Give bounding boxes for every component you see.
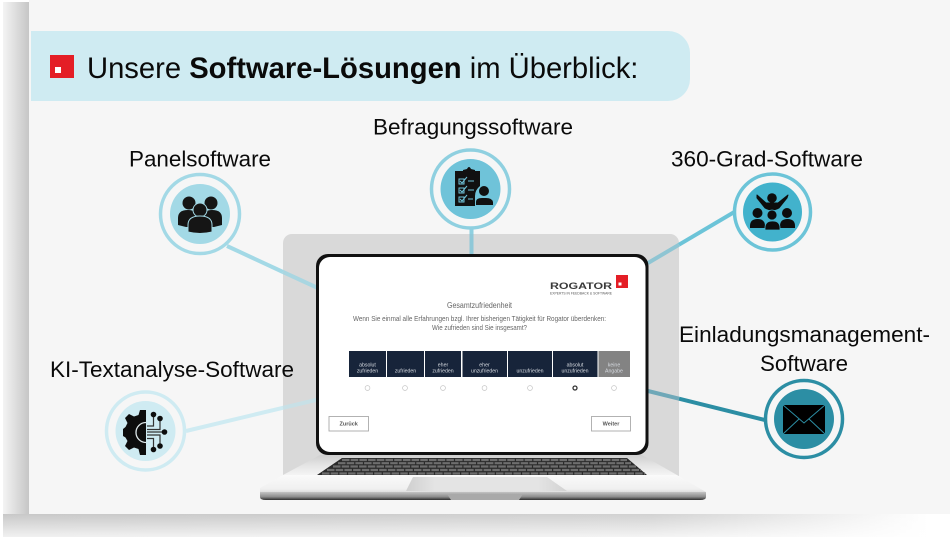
screen xyxy=(319,257,646,452)
label: Einladungsmanagement-Software xyxy=(679,322,930,376)
icon: gear with circuit xyxy=(123,410,167,455)
button: Zurück xyxy=(329,416,368,431)
screen bezel xyxy=(316,254,648,455)
answer scale: eher xyxy=(479,362,490,368)
node: Panelsoftware xyxy=(160,174,240,254)
button: Zurück: Zurück xyxy=(340,422,359,428)
answer scale: zufrieden xyxy=(432,368,454,374)
title: Unsere Software-Lösungen im Überblick: xyxy=(87,53,638,85)
icon: group of people xyxy=(178,196,222,234)
header banner xyxy=(31,31,690,101)
survey question: Gesamtzufriedenheit xyxy=(447,301,513,310)
answer scale: zufrieden xyxy=(395,368,416,374)
answer scale: absolut xyxy=(359,362,376,368)
laptop xyxy=(260,254,706,500)
icon: red square xyxy=(50,55,74,78)
trackpad xyxy=(406,477,567,491)
answer scale: zufrieden xyxy=(357,368,378,374)
survey question: Wie zufrieden sind Sie insgesamt? xyxy=(432,323,527,332)
label: Einladungsmanagement-Software: Software xyxy=(760,351,848,376)
survey question xyxy=(353,301,606,332)
logo: Rogator: ROGATOR xyxy=(550,281,612,292)
laptop base xyxy=(260,455,706,500)
laptop backdrop xyxy=(283,234,679,476)
connector lines xyxy=(186,211,765,431)
icon: envelope xyxy=(783,405,825,434)
answer scale: keine xyxy=(608,362,620,368)
icon: team with raised arms xyxy=(750,193,795,230)
node: KI-Textanalyse-Software xyxy=(106,392,184,470)
node: 360-Grad-Software xyxy=(734,174,810,250)
logo: Rogator xyxy=(550,275,628,296)
label: Einladungsmanagement-Software: Einladungsmanagement- xyxy=(679,322,930,347)
answer scale: unzufrieden xyxy=(561,368,589,374)
answer scale: unzufrieden xyxy=(471,368,498,374)
answer scale: absolut xyxy=(567,362,584,368)
label: KI-Textanalyse-Software: KI-Textanalyse-Software xyxy=(50,357,294,382)
label: Panelsoftware: Panelsoftware xyxy=(129,146,271,172)
answer scale: unzufrieden xyxy=(516,368,544,374)
button: Weiter: Weiter xyxy=(603,422,620,428)
survey question: Wenn Sie einmal alle Erfahrungen bzgl. Ihrer bisherigen Tätigkeit für Rogator überdenken: xyxy=(353,314,606,323)
node: Einladungsmanagement-Software xyxy=(766,380,842,458)
button: Weiter xyxy=(592,416,630,431)
keyboard xyxy=(317,458,647,475)
radio buttons xyxy=(365,386,616,390)
answer scale: Angabe xyxy=(605,368,623,374)
node: Befragungssoftware xyxy=(432,150,510,228)
answer scale: eher xyxy=(438,362,448,368)
answer scale xyxy=(349,351,630,377)
logo: Rogator: EXPERTS IN FEEDBACK & SOFTWARE xyxy=(550,292,613,296)
icon: clipboard with person xyxy=(455,167,493,206)
label: 360-Grad-Software: 360-Grad-Software xyxy=(671,146,863,172)
label: Befragungssoftware: Befragungssoftware xyxy=(373,114,573,140)
